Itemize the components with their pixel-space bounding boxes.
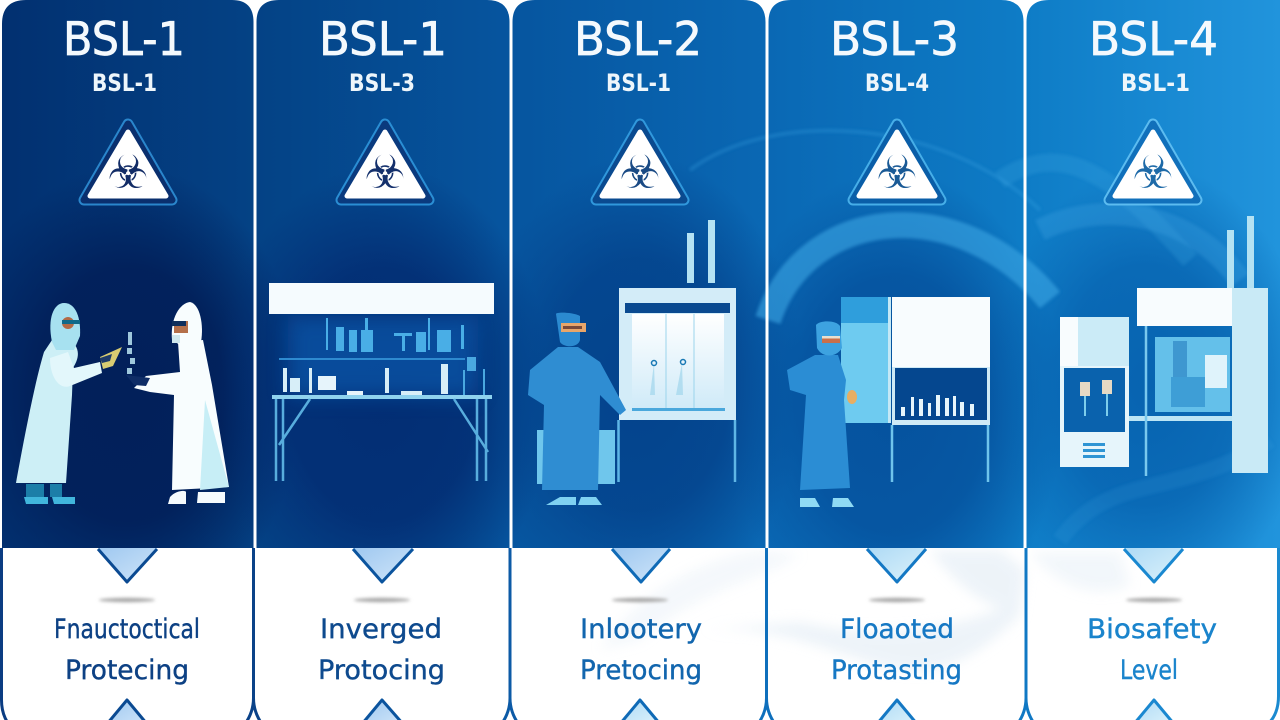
- bottom marker: up triangle: [107, 700, 147, 720]
- heading: BSL-2: [574, 12, 702, 66]
- panel: BSL-3 containment: [787, 12, 990, 720]
- safety cabinet: [618, 288, 736, 482]
- icon: biohazard warning triangle: ☣: [619, 145, 661, 199]
- bottom marker: up triangle: [620, 700, 660, 720]
- shadow dash: [1126, 598, 1182, 602]
- icon: biohazard warning triangle: [1109, 124, 1197, 200]
- heading: BSL-1: [63, 12, 185, 66]
- tall cabinet: [841, 297, 891, 423]
- subheading: BSL-1: [1121, 69, 1190, 97]
- icon: biohazard warning triangle: [84, 124, 172, 200]
- side unit: [537, 430, 615, 484]
- subheading: BSL-1: [92, 69, 157, 97]
- white unit: [892, 297, 990, 482]
- illustration: two scientists in white coats: [16, 302, 229, 504]
- label: Floaoted: [840, 614, 954, 645]
- subheading: BSL-4: [865, 69, 929, 97]
- panel: BSL-4 maximum containment: [1060, 12, 1268, 720]
- label line two: Protecing: [65, 655, 189, 686]
- separator marker: down triangle: [1124, 548, 1183, 582]
- left isolator: [1060, 317, 1129, 467]
- subheading: BSL-1: [606, 69, 671, 97]
- panel: BSL-1 basic: [16, 12, 229, 720]
- shadow dash: [869, 598, 925, 602]
- shadow dash: [354, 598, 410, 602]
- technician: [528, 313, 626, 505]
- label: Biosafety: [1087, 614, 1217, 645]
- label line two: Protasting: [831, 655, 962, 686]
- scientist right: [126, 302, 229, 504]
- heading: BSL-1: [319, 12, 447, 66]
- separator marker: down triangle: [867, 548, 926, 582]
- separator marker: down triangle: [612, 548, 670, 582]
- bottom marker: up triangle: [1134, 700, 1174, 720]
- label: Fnauctoctical: [54, 614, 200, 645]
- chimneys: [1227, 216, 1254, 288]
- illustration: containment equipment and technician: [787, 297, 990, 507]
- heading: BSL-3: [830, 12, 959, 66]
- icon: biohazard warning triangle: ☣: [876, 145, 918, 199]
- pale wisps behind lower cards: [600, 550, 1130, 671]
- icon: biohazard warning triangle: [853, 124, 941, 200]
- heading: BSL-4: [1089, 12, 1218, 66]
- hood and window: [1129, 288, 1268, 476]
- icon: biohazard warning triangle: ☣: [1132, 145, 1174, 199]
- label line two: Level: [1120, 655, 1178, 686]
- icon: biohazard warning triangle: [596, 124, 684, 200]
- label: Inverged: [320, 614, 442, 645]
- icon: biohazard warning triangle: ☣: [364, 145, 406, 199]
- illustration: lab bench with glassware: [269, 283, 494, 481]
- label line two: Pretocing: [580, 655, 702, 686]
- subheading: BSL-3: [349, 69, 415, 97]
- shadow dash: [99, 598, 155, 602]
- bottom marker: up triangle: [362, 700, 403, 720]
- illustration: isolator and glovebox: [1060, 216, 1268, 476]
- label: Inlootery: [580, 614, 702, 645]
- icon: biohazard warning triangle: ☣: [107, 145, 149, 199]
- icon: biohazard warning triangle: [341, 124, 429, 200]
- separator marker: down triangle: [98, 548, 157, 582]
- panel: BSL-1 open bench: [269, 12, 494, 720]
- shadow dash: [612, 598, 668, 602]
- technician: [787, 321, 857, 507]
- separator marker: down triangle: [353, 548, 413, 582]
- card borders: [2, 548, 1278, 720]
- scientist left: [16, 303, 122, 504]
- label line two: Protocing: [318, 655, 445, 686]
- bottom marker: up triangle: [877, 700, 917, 720]
- illustration: cabinet and technician: [528, 220, 736, 505]
- blue upper band: [2, 0, 1280, 548]
- chimneys: [687, 220, 715, 283]
- panel: BSL-2 safety cabinet: [528, 12, 736, 720]
